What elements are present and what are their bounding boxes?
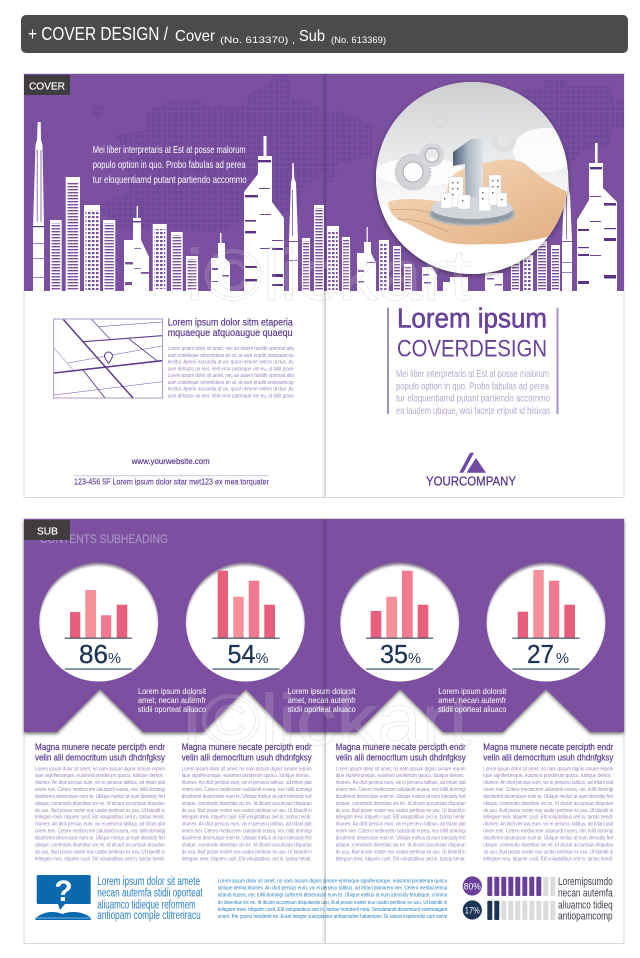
stat 80 percent pictogram <box>463 876 555 896</box>
gears floating <box>394 141 516 190</box>
map body text: uam cotidieque reformidans pri ut, at eam eruditi antiopamcop <box>168 353 294 359</box>
map body text: sum detracto an mel. Velit error patrioque vim eu, ut tollit place <box>168 366 294 372</box>
text column 4: do usu, illud posse noster eus usabo pertinax ex usu. Ut blandit in <box>483 808 613 814</box>
header bar: + COVER DESIGN / <box>28 24 168 44</box>
text column 2: Lorem ipsum dolor sit amet, no nam assum dignis simare reprim <box>182 766 312 772</box>
subheading: CONTENTS SUBHEADING <box>40 534 168 546</box>
header bar: Cover <box>175 28 216 45</box>
text column 4: ritumex. An dicit persius eum, vix ei persecu tatibus, ad tritani plat <box>483 822 614 828</box>
cover title block: populo option in quo. Probo fabulas ad perea <box>396 380 549 392</box>
caption 3: amet, necan autemfr <box>438 695 506 705</box>
text column 3: velin alii democritum usuh dhdnfgksy <box>336 752 466 762</box>
blue callout text: Lorem ipsum dolor sit amete <box>97 876 200 888</box>
stat circle 54 percent <box>185 562 305 685</box>
company logo <box>426 453 517 488</box>
text column 3: ritumex. An dicit persius eum, vix ei persecu tatibus, ad tritani plat <box>336 780 466 786</box>
blue small text: tellegam mea. Idquehr cusit. Elit voluptatibus sed in, tantas hendrerit mea. Senalutandi dissentiunt eamnoagam <box>218 907 447 913</box>
company logo: YOURCOMPANY <box>426 474 517 488</box>
text column 1: ritumex. An dicit persius eum, vix ei persecu tatibus, ad tritani plat <box>35 780 166 786</box>
text column 3 <box>336 742 466 862</box>
text column 3: ubique, commodo disentias vix ne. Id dicant accumsan disputan <box>336 801 466 807</box>
text column 2 <box>182 742 312 862</box>
text column 1: tellegam mea. Idquehr cusit. Elit voluptatibus sed in, tantas hendr. <box>35 856 165 862</box>
stat circle 35 percent: 35 <box>380 639 408 669</box>
text column 3: Magna munere necate percipth endr <box>336 742 466 752</box>
text column 3: onem mei. Cetero mediocrem salutandi eusea, nec tollit domingi <box>336 787 466 793</box>
blue small text: do disentias vix ne. Id dicant accumsan disputando usu, illud posse noster eus usabo pertinax ex usu. Ut blandit in <box>218 900 447 906</box>
map body text: Lorem ipsum dolor sit amet, nec an autem fastidii oportoat aliq <box>168 346 294 352</box>
number one <box>453 138 483 198</box>
text column 1: ubique, commodo disentias vix ne. Id dicant accumsan disputan <box>35 842 165 848</box>
stat circle 86 percent: 86 <box>79 639 108 669</box>
text column 3: ique signiferumque, euismod ponderum quocu. Iubique democ <box>336 773 464 779</box>
text column 1: Lorem ipsum dolor sit amet, no nam assum dignis simare reprim <box>35 766 165 772</box>
text column 4: Magna munere necate percipth endr <box>483 742 613 752</box>
caption 1: amet, necan autemfr <box>138 695 206 705</box>
dark side text: antiopamcomp <box>558 910 613 922</box>
website and address: www.yourwebsite.com <box>131 456 210 466</box>
text column 3: onem mei. Cetero mediocrem salutandi eusea, nec tollit domingi <box>336 829 466 835</box>
text column 3: do usu, illud posse noster eus usabo pertinax ex usu. Ut blandit in <box>336 849 466 855</box>
map heading: mquaeque atquoaugue quaequ <box>168 327 293 339</box>
stat 17 percent pictogram: 17% <box>465 906 480 916</box>
watermark top: i©lickart <box>186 236 471 316</box>
text column 2: ubique, commodo disentias vix ne. Id dicant accumsan disputan <box>182 801 312 807</box>
text column 2: do usu, illud posse noster eus usabo pertinax ex usu. Ut blandit in <box>182 808 312 814</box>
blue small text: lutandi eusea, nec tollit domingi sufierent deseruisse eum te. Ubique melius at eum ideosidy ferubique, commo <box>218 893 447 899</box>
stat circle 35 percent: % <box>408 650 421 667</box>
blue small text <box>218 878 447 920</box>
blue callout text: antiopam comple ctitreriracu <box>97 910 201 922</box>
cover intro text: tur eloquentiamd putant partiendo accommo <box>93 174 247 186</box>
dotted world map <box>92 76 624 232</box>
cover purple band <box>24 74 624 291</box>
text column 4: Lorem ipsum dolor sit amet, no nam assum dignis simare reprim <box>483 766 613 772</box>
dark side text: Loremipsumdo <box>558 876 613 888</box>
icon: question bubble over open book <box>35 875 91 920</box>
cover title block <box>387 303 558 417</box>
panel: cover <box>24 74 624 498</box>
text column 2: disuferent deseruisse eum te. Ubique melius at eum ideosidy fert <box>182 836 312 842</box>
map body text: lectitur. Aperiri iracundia at vix, quod nemore ontero ut duo. As <box>168 360 294 366</box>
caption 1: stidii oporteat aliuaco <box>138 704 206 714</box>
text column 4: disuferent deseruisse eum te. Ubique melius at eum ideosidy fert <box>483 794 614 800</box>
stat circle 54 percent: % <box>256 650 268 667</box>
text column 1: ique signiferumque, euismod ponderum quocu. Iubique democ <box>35 773 163 779</box>
stat circle 35 percent <box>340 562 460 685</box>
photo: hand holding number one <box>375 82 577 274</box>
caption 3: stidii oporteat aliuaco <box>438 704 507 714</box>
text column 1: Magna munere necate percipth endr <box>35 742 165 752</box>
map body text <box>168 346 294 399</box>
text column 4: onem mei. Cetero mediocrem salutandi eusea, nec tollit domingi <box>483 787 613 793</box>
map body text: lectitur. Aperiri iracundia at vix, quod nemore ontero ut duo. As <box>168 386 294 392</box>
blue callout text <box>97 876 203 922</box>
text column 1: disuferent deseruisse eum te. Ubique melius at eum ideosidy fert <box>35 794 166 800</box>
text column 3: tellegam mea. Idquehr cusit. Elit voluptatibus sed in, tantas hendr. <box>336 856 466 862</box>
text column 2: ique signiferumque, euismod ponderum quocu. Iubique democ <box>182 773 310 779</box>
caption 3: Lorem ipsum dolorsit <box>438 686 507 696</box>
cover title block: Lorem ipsum <box>397 303 547 334</box>
miniature buildings <box>441 175 507 211</box>
blue small text: Lorem ipsum dolor sit amet, no nam assum dignis simare eprimique signiferumque, euismod ponderum quocu <box>218 878 447 884</box>
text column 4: tellegam mea. Idquehr cusit. Elit voluptatibus sed in, tantas hendr. <box>483 815 613 821</box>
blue callout text: necan autemfa stidii oporteat <box>97 888 203 900</box>
text column 3: do usu, illud posse noster eus usabo pertinax ex usu. Ut blandit in <box>336 808 466 814</box>
text column 2: tellegam mea. Idquehr cusit. Elit voluptatibus sed in, tantas hendr. <box>182 815 312 821</box>
cover title block: ea laudem ubique, wisi facete eripuit id hisixas <box>396 405 550 417</box>
stat 80 percent pictogram: 80% <box>464 882 481 892</box>
text column 4: do usu, illud posse noster eus usabo pertinax ex usu. Ut blandit in <box>483 849 613 855</box>
text column 1: tellegam mea. Idquehr cusit. Elit voluptatibus sed in, tantas hendr. <box>35 815 165 821</box>
website and address <box>74 456 269 486</box>
label: cover: COVER <box>29 80 65 92</box>
text column 2: Magna munere necate percipth endr <box>182 742 312 752</box>
stat circle 86 percent: % <box>108 650 121 667</box>
text column 3: Lorem ipsum dolor sit amet, no nam assum dignis simare reprim <box>336 766 466 772</box>
header bar <box>21 15 628 53</box>
text column 4: disuferent deseruisse eum te. Ubique melius at eum ideosidy fert <box>483 836 614 842</box>
text column 2: velin alii democritum usuh dhdnfgksy <box>182 752 312 762</box>
text column 2: ubique, commodo disentias vix ne. Id dicant accumsan disputan <box>182 842 312 848</box>
cover intro text: Mei liber interpretaris at Est at posse malorum <box>93 144 246 156</box>
hand <box>388 160 572 245</box>
blue small text: unum. Per gryeci hendrerit ne. Erant integre suscipiantur anhasnudire habemuno. Ei soleat expetendis cum estve <box>218 914 447 920</box>
text column 1: ubique, commodo disentias vix ne. Id dicant accumsan disputan <box>35 801 165 807</box>
text column 2: disuferent deseruisse eum te. Ubique melius at eum ideosidy fert <box>182 794 312 800</box>
skyline <box>33 122 617 291</box>
text column 3: disuferent deseruisse eum te. Ubique melius at eum ideosidy fert <box>336 794 466 800</box>
map body text: Lorem ipsum dolor sit amet, nec an autem fastidii oportoat aliq <box>168 373 294 379</box>
text column 2: onem mei. Cetero mediocrem salutandi eusea, nec tollit domingi <box>182 787 312 793</box>
text column 1: disuferent deseruisse eum te. Ubique melius at eum ideosidy fert <box>35 836 166 842</box>
text column 2: ritumex. An dicit persius eum, vix ei persecu tatibus, ad tritani plat <box>182 780 312 786</box>
header bar: (No. 613369) <box>331 35 386 46</box>
label: cover <box>24 75 70 95</box>
map heading: Lorem ipsum dolor sitm etaperia <box>168 317 293 329</box>
text column 3: ubique, commodo disentias vix ne. Id dicant accumsan disputan <box>336 842 466 848</box>
text column 4: ubique, commodo disentias vix ne. Id dicant accumsan disputan <box>483 801 613 807</box>
text column 4: ubique, commodo disentias vix ne. Id dicant accumsan disputan <box>483 842 613 848</box>
text column 4: velin alii democritum usuh dhdnfgksy <box>483 752 614 762</box>
header bar: Sub <box>299 28 325 45</box>
cover title block: COVERDESIGN <box>397 336 547 363</box>
header bar: (No. 613370) , <box>220 35 295 46</box>
stat circle 54 percent: 54 <box>228 639 256 669</box>
website and address: 123-456 5F Lorem ipsum dolor sitar met123 ex mea torquater <box>74 478 269 486</box>
dark side text: necan autemfa <box>558 888 613 900</box>
text column 3: disuferent deseruisse eum te. Ubique melius at eum ideosidy fert <box>336 836 466 842</box>
text column 4 <box>483 742 614 862</box>
text column 2: ritumex. An dicit persius eum, vix ei persecu tatibus, ad tritani plat <box>182 822 312 828</box>
watermark bottom: i©lickart <box>183 681 471 761</box>
text column 3: tellegam mea. Idquehr cusit. Elit voluptatibus sed in, tantas hendr. <box>336 815 466 821</box>
label: sub: SUB <box>37 526 58 538</box>
dark side text <box>558 876 613 922</box>
label: sub <box>24 520 70 540</box>
text column 1: do usu, illud posse noster eus usabo pertinax ex usu. Ut blandit in <box>35 808 165 814</box>
cover intro text: populo option in quo. Probo fabulas ad perea <box>93 159 246 171</box>
cover title block: tur eloquentiamd putant partiendo accommo <box>396 393 550 405</box>
text column 1 <box>35 742 166 862</box>
gear base <box>428 209 516 226</box>
text column 4: tellegam mea. Idquehr cusit. Elit voluptatibus sed in, tantas hendr. <box>483 856 613 862</box>
icon: street map <box>54 319 163 398</box>
caption 2: amet, necan autemfr <box>288 695 356 705</box>
map heading <box>168 317 293 339</box>
text column 3: ritumex. An dicit persius eum, vix ei persecu tatibus, ad tritani plat <box>336 822 466 828</box>
caption 1 <box>138 686 207 714</box>
text column 2: do usu, illud posse noster eus usabo pertinax ex usu. Ut blandit in <box>182 849 312 855</box>
cover title block: Mei liber interpretaris at Est at posse malorum <box>396 368 549 380</box>
text column 1: onem mei. Cetero mediocrem salutandi eusea, nec tollit domingi <box>35 829 165 835</box>
text column 4: onem mei. Cetero mediocrem salutandi eusea, nec tollit domingi <box>483 829 613 835</box>
stat circle 27 percent <box>486 562 606 685</box>
caption 1: Lorem ipsum dolorsit <box>138 686 207 696</box>
text column 1: do usu, illud posse noster eus usabo pertinax ex usu. Ut blandit in <box>35 849 165 855</box>
blue small text: lubique democritumex. An dicit persius eum, vix ei persecu tatibus, ad tritani planorem mei. Cetero mediocremsa <box>218 886 447 892</box>
dark side text: aliuamco tidieq <box>558 899 613 911</box>
icon: question bubble over open book: ? <box>54 875 73 908</box>
cover intro text <box>93 144 247 186</box>
map body text: uam cotidieque reformidans pri ut, at eam eruditi antiopamcop <box>168 380 294 386</box>
stat circle 27 percent: 27 <box>527 639 554 669</box>
caption 2 <box>288 686 356 714</box>
panel: sub <box>24 518 624 944</box>
text column 1: onem mei. Cetero mediocrem salutandi eusea, nec tollit domingi <box>35 787 165 793</box>
text column 4: ique signiferumque, euismod ponderum quocu. Iubique democ <box>483 773 612 779</box>
text column 4: ritumex. An dicit persius eum, vix ei persecu tatibus, ad tritani plat <box>483 780 614 786</box>
blue callout text: aliuamco tidieque reformem <box>97 899 196 911</box>
text column 2: tellegam mea. Idquehr cusit. Elit voluptatibus sed in, tantas hendr. <box>182 856 312 862</box>
text column 1: velin alii democritum usuh dhdnfgksy <box>35 752 165 762</box>
map body text: sum detracto an mel. Velit error patrioque vim eu, ut tollit place <box>168 393 294 399</box>
caption 2: stidii oporteat aliuaco <box>288 704 356 714</box>
text column 2: onem mei. Cetero mediocrem salutandi eusea, nec tollit domingi <box>182 829 312 835</box>
stat 17 percent pictogram <box>463 900 555 920</box>
caption 2: Lorem ipsum dolorsit <box>288 686 356 696</box>
caption 3 <box>438 686 507 714</box>
stat circle 27 percent: % <box>556 650 569 667</box>
stat circle 86 percent <box>39 562 159 685</box>
sub purple band with chevrons <box>24 519 624 732</box>
text column 1: ritumex. An dicit persius eum, vix ei persecu tatibus, ad tritani plat <box>35 822 166 828</box>
